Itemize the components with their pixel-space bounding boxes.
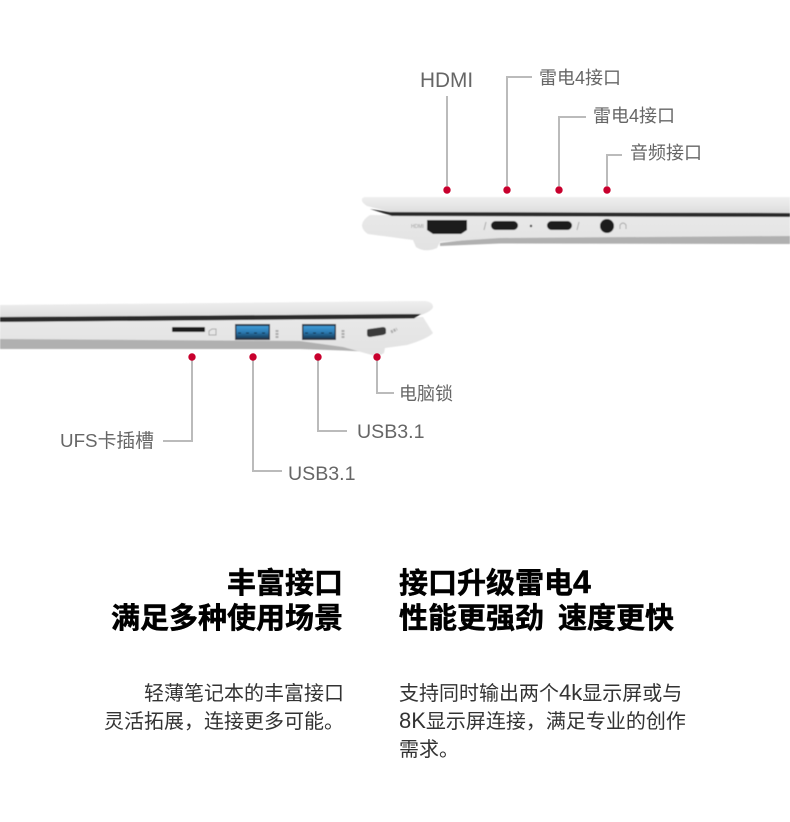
icon: USB port 2: [302, 324, 336, 340]
text block: right description: 需求。: [399, 738, 459, 761]
icon: UFS card slot: [172, 327, 205, 332]
text block: left description: [104, 682, 344, 733]
callout: audio: [603, 143, 702, 194]
text block: right description: 支持同时输出两个4k显示屏或与: [399, 680, 682, 705]
callout: UFS card: UFS卡插槽: [60, 430, 154, 451]
text block: left description: 灵活拓展，连接更多可能。: [104, 710, 344, 733]
callout: UFS card: [60, 353, 196, 451]
heading: rich ports: 满足多种使用场景: [111, 602, 343, 635]
callout: Thunderbolt 4 first: 雷电4接口: [539, 68, 621, 88]
text block: right description: 8K显示屏连接，满足专业的创作: [399, 708, 686, 733]
callout: lock: 电脑锁: [399, 384, 453, 404]
heading: rich ports: [111, 567, 343, 635]
callout: HDMI: HDMI: [420, 69, 473, 92]
callout: Thunderbolt 4 second: 雷电4接口: [593, 106, 675, 126]
heading: Thunderbolt 4 upgrade: 速度更快: [558, 602, 674, 635]
callout: USB3.1 first: USB3.1: [288, 463, 356, 485]
callout: Thunderbolt 4 second: [555, 106, 675, 194]
heading: Thunderbolt 4 upgrade: 接口升级雷电4: [399, 564, 591, 600]
text block: right description: [399, 680, 686, 761]
icon: Thunderbolt port 2: [547, 221, 572, 230]
callout: USB3.1 second: USB3.1: [357, 421, 425, 443]
text block: left description: 轻薄笔记本的丰富接口: [144, 682, 344, 705]
heading: rich ports: 丰富接口: [227, 567, 343, 600]
laptop: right side view with ports: HDMI: [411, 224, 424, 230]
laptop: left side view with ports: [0, 301, 433, 356]
callout: audio: 音频接口: [630, 143, 702, 163]
callout: Thunderbolt 4 first: [503, 68, 621, 194]
callout: USB3.1 second: [314, 353, 425, 443]
callout: lock: [373, 353, 453, 404]
callout: USB3.1 first: [249, 353, 356, 485]
heading: Thunderbolt 4 upgrade: 性能更强劲: [399, 602, 544, 635]
heading: Thunderbolt 4 upgrade: [399, 564, 674, 635]
icon: lock slot: [367, 327, 386, 337]
icon: Thunderbolt port 1: [491, 221, 518, 230]
callout: HDMI: [420, 69, 473, 194]
icon: audio jack: [600, 219, 614, 233]
laptop: right side view with ports: [362, 197, 790, 250]
icon: HDMI port: [427, 220, 467, 234]
icon: USB port 1: [235, 324, 270, 340]
